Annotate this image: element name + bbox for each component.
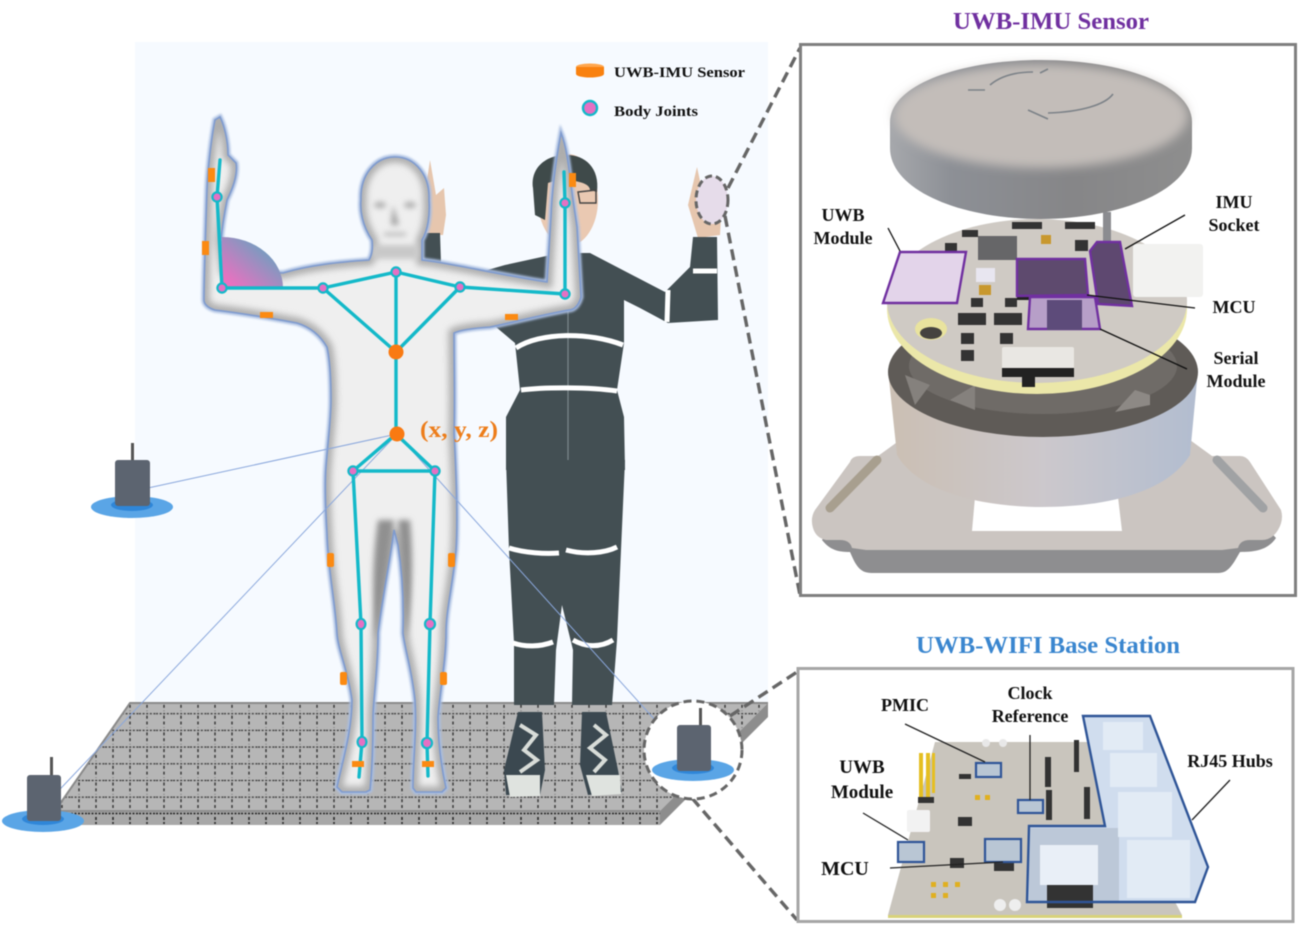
skeleton lines xyxy=(217,160,565,777)
mannequin: edge and leg shading xyxy=(204,117,581,792)
panel: UWB-IMU Sensor xyxy=(800,44,1296,596)
highlight: clock reference xyxy=(1018,800,1043,813)
label: Serial Module: Serial xyxy=(1214,348,1258,368)
highlight: RJ45 hubs xyxy=(1027,716,1208,908)
label: UWB Module: UWB xyxy=(839,757,885,778)
label: IMU Socket: Socket xyxy=(1208,215,1260,235)
person: hands xyxy=(418,160,722,238)
leader lines xyxy=(888,215,1195,369)
panel: UWB-WIFI Base Station xyxy=(798,668,1293,922)
label: UWB Module: Module xyxy=(831,782,893,803)
label: UWB Module: Module xyxy=(813,228,873,248)
highlight: MCU xyxy=(985,839,1021,862)
highlight: UWB module xyxy=(898,842,924,862)
ranging lines from base stations xyxy=(45,434,655,805)
legend: sensor icon xyxy=(576,64,604,78)
body joints xyxy=(212,192,570,748)
mannequin body xyxy=(204,117,581,792)
capture room background panel xyxy=(135,42,768,704)
legend: joint label: Body Joints xyxy=(614,104,698,120)
person: white strap bands xyxy=(509,271,717,646)
root joints xyxy=(388,344,404,442)
person: head xyxy=(533,154,598,246)
highlight: PMIC xyxy=(976,763,1001,777)
highlight: IMU socket xyxy=(1090,242,1132,306)
base station: magnified circle xyxy=(644,701,742,799)
sensor highlight on wrist xyxy=(696,176,728,224)
floor platform xyxy=(55,703,768,825)
base station: front left xyxy=(2,757,84,832)
person: jacket xyxy=(419,233,718,470)
legend: sensor label: UWB-IMU Sensor xyxy=(614,65,745,81)
highlight: MCU xyxy=(1017,259,1088,296)
legend xyxy=(576,64,745,120)
base station: left xyxy=(91,443,173,518)
base station board xyxy=(888,739,1182,918)
zoom connectors to base station panel xyxy=(692,672,797,920)
label: Clock Reference: Clock xyxy=(1008,683,1052,703)
label: MCU: MCU xyxy=(1212,297,1256,317)
zoom connectors to UWB-IMU panel xyxy=(725,48,800,595)
label: IMU Socket: IMU xyxy=(1216,192,1252,212)
label: Clock Reference: Reference xyxy=(992,706,1068,726)
sensor top lid xyxy=(890,60,1192,219)
legend: joint icon xyxy=(583,101,597,115)
label: UWB Module: UWB xyxy=(821,205,865,225)
coordinates label: (x, y, z) xyxy=(420,417,498,442)
person wearing sensor suit xyxy=(418,154,722,797)
label: MCU: MCU xyxy=(821,858,869,880)
title: UWB-IMU Sensor: UWB-IMU Sensor xyxy=(953,9,1149,35)
sensor lower housing xyxy=(888,307,1198,507)
person: shoes xyxy=(504,712,622,797)
label: Serial Module: Module xyxy=(1206,371,1266,391)
label: RJ45 Hubs: RJ45 Hubs xyxy=(1187,751,1273,771)
label: PMIC: PMIC xyxy=(881,695,929,715)
title: UWB-WIFI Base Station: UWB-WIFI Base Station xyxy=(916,633,1180,659)
UWB-IMU sensors on body xyxy=(202,168,576,767)
highlight: serial module xyxy=(1028,297,1100,330)
leader lines xyxy=(863,724,1230,868)
angle sector at elbow xyxy=(222,237,283,288)
person: trousers xyxy=(506,460,625,705)
person: zipper xyxy=(567,300,569,490)
sensor base plate xyxy=(812,440,1282,573)
sensor circuit board xyxy=(887,212,1203,394)
highlight: UWB module xyxy=(883,252,966,303)
